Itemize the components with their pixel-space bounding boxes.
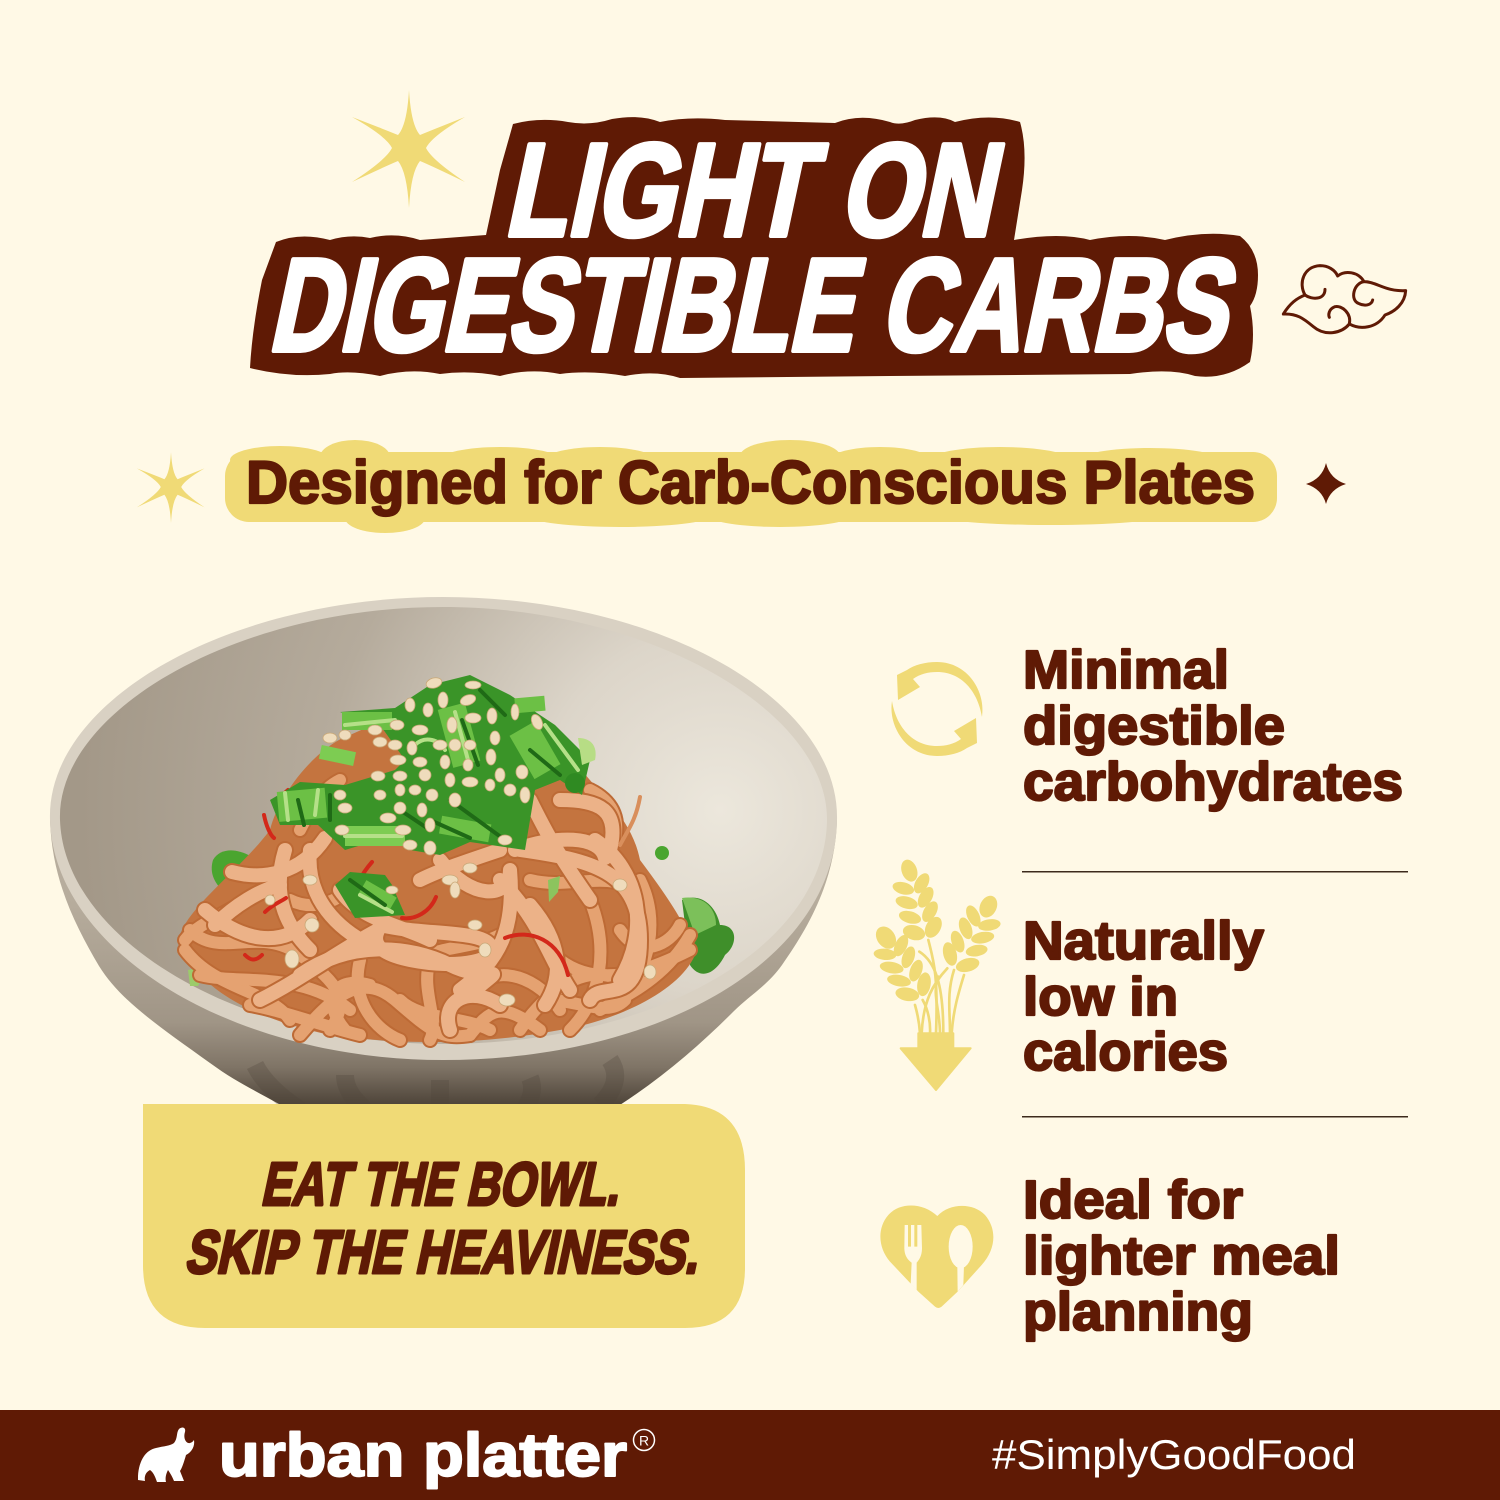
noodle layer: back highlights (185, 780, 690, 1040)
hashtag: #SimplyGoodFood (992, 1431, 1356, 1478)
noodle mound base (180, 730, 694, 1042)
title (250, 117, 1258, 379)
subtitle banner (225, 440, 1277, 533)
noodle strand right (620, 797, 640, 845)
title line one: LIGHT ON (497, 117, 1016, 264)
bowl rim (50, 597, 837, 1060)
benefit text: digestible (1023, 696, 1285, 756)
callout line two: SKIP THE HEAVINESS. (181, 1219, 709, 1287)
noodle layer: front highlights (205, 800, 640, 1030)
benefit text: lighter meal (1023, 1226, 1340, 1286)
icon: cycle arrows (891, 662, 983, 756)
noodles (180, 690, 695, 1042)
noodle layer: back shadows (185, 780, 690, 1040)
icon: small dark sparkle right (1306, 463, 1346, 504)
benefit text (1023, 911, 1264, 1082)
food photo: bowl of noodles (50, 597, 837, 1110)
benefit text: low in (1023, 967, 1178, 1027)
subtitle background (225, 440, 1277, 533)
footer bar (0, 1410, 1500, 1500)
green onion sliver (548, 876, 560, 902)
registered mark: R (639, 1432, 649, 1448)
bowl exterior (50, 820, 837, 1110)
benefit text: Naturally (1023, 911, 1264, 971)
brand name: urban platter (219, 1421, 627, 1489)
icon: large sparkle (352, 90, 465, 208)
benefit text: calories (1023, 1022, 1228, 1082)
benefit: naturally low in calories (872, 857, 1264, 1090)
green onions (270, 675, 596, 918)
benefit: minimal digestible carbohydrates (891, 640, 1403, 812)
benefit text: planning (1023, 1282, 1253, 1342)
registered mark (634, 1430, 654, 1450)
red chili slices (245, 790, 568, 975)
benefit text: carbohydrates (1023, 752, 1403, 812)
bowl interior (60, 607, 827, 1044)
benefit: ideal for lighter meal planning (880, 1170, 1340, 1342)
benefit text (1023, 1170, 1340, 1342)
callout panel (143, 1104, 745, 1328)
garnish greens behind noodles (188, 846, 734, 986)
title backdrop (250, 117, 1258, 378)
callout line one: EAT THE BOWL. (257, 1151, 630, 1219)
bowl facets (255, 1060, 615, 1110)
benefit text: Ideal for (1023, 1170, 1243, 1230)
icon: cloud (1283, 266, 1406, 333)
subtitle text: Designed for Carb-Conscious Plates (246, 449, 1255, 516)
sesame seeds (265, 676, 656, 1006)
benefit text (1023, 640, 1403, 812)
icon: elephant logo (138, 1428, 194, 1482)
callout (143, 1104, 745, 1328)
noodle layer: front shadows (205, 800, 640, 1030)
icon: heart with fork and spoon (880, 1205, 993, 1308)
benefit text: Minimal (1023, 640, 1229, 700)
icon: wheat with down arrow (872, 857, 1001, 1090)
icon: small sparkle left (137, 452, 205, 523)
